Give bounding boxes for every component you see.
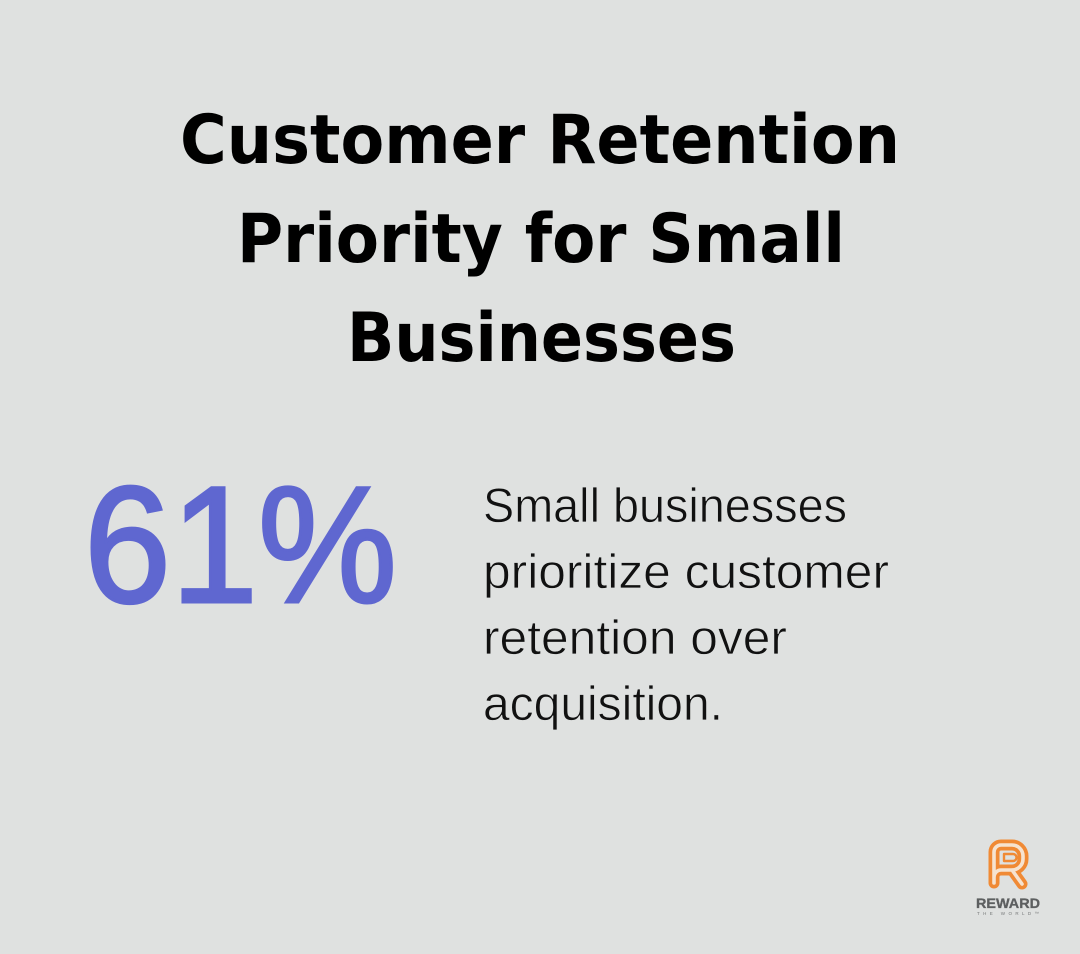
statistic: 61%: 61%: [84, 453, 397, 638]
description text: [483, 480, 889, 731]
wordmark: REWARD: [976, 896, 1040, 911]
tagline: THE WORLD™: [977, 911, 1039, 916]
logo: Reward the World: [976, 845, 1040, 916]
description text: Small businesses: [483, 480, 847, 533]
description text: prioritize customer: [483, 546, 889, 599]
title: [180, 101, 900, 378]
title: Customer Retention: [180, 101, 900, 180]
description text: acquisition.: [483, 678, 723, 731]
description text: retention over: [483, 612, 787, 665]
title: Businesses: [347, 299, 736, 378]
title: Priority for Small: [237, 200, 845, 279]
icon: orange R mark: [994, 845, 1023, 884]
